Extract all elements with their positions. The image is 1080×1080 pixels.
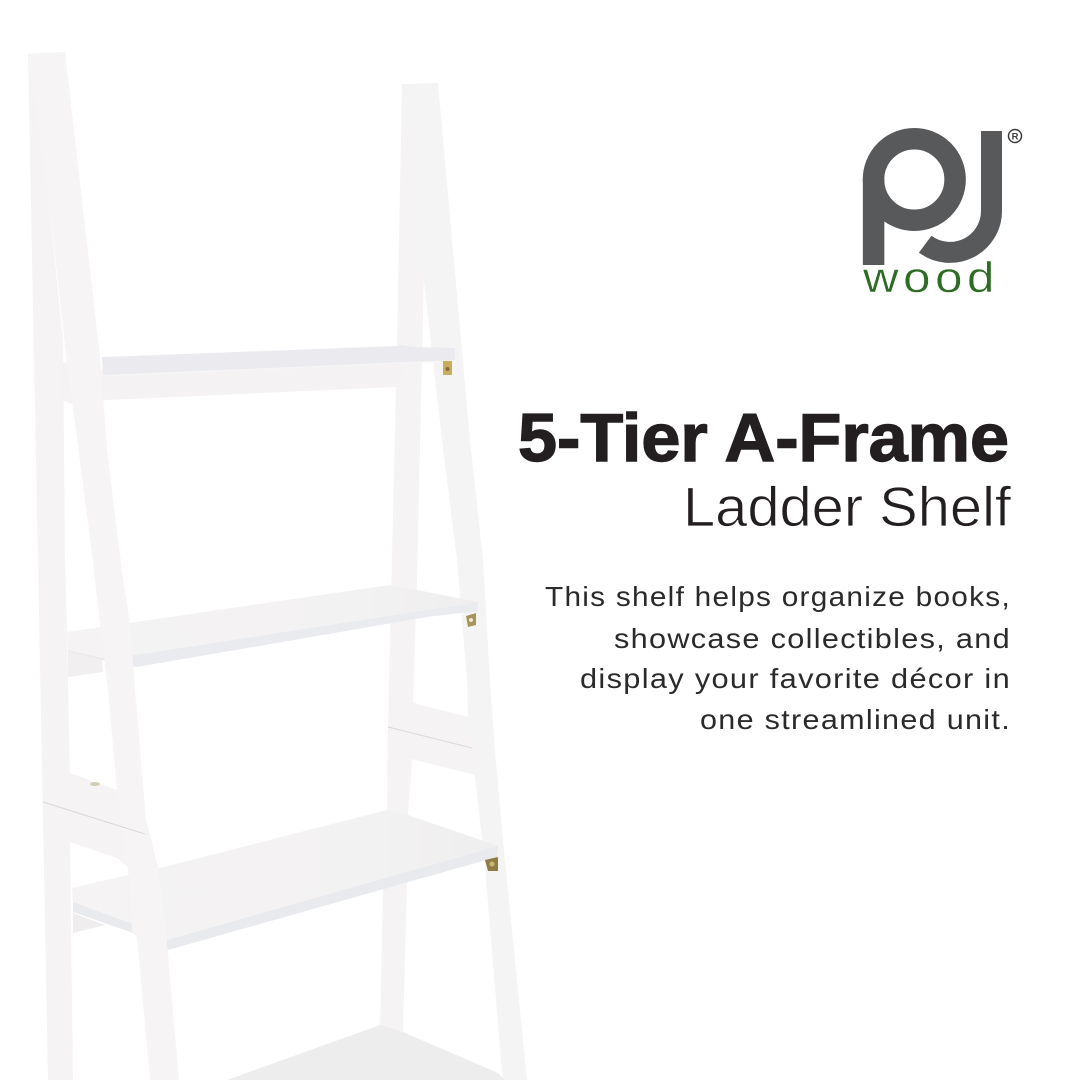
logo: PJ wood (862, 130, 1022, 302)
left front leg (28, 52, 179, 1080)
shelf 1 (102, 345, 455, 377)
shelf 4 (227, 1025, 505, 1080)
description text block: showcase collectibles, and (614, 623, 1011, 654)
product image: white ladder shelf (28, 52, 527, 1080)
brass bracket 3 (485, 857, 498, 871)
left back leg (28, 54, 73, 1080)
heading line 1: 5-Tier A-Frame (518, 400, 1009, 476)
registered mark: R (1012, 132, 1019, 142)
registered mark (1008, 130, 1022, 142)
description text block (545, 581, 1011, 735)
logo letter p (874, 139, 955, 265)
left stub rail under third shelf (73, 913, 105, 933)
shelf 2 (67, 585, 478, 667)
shelf 3 (72, 810, 498, 950)
left frame crossbar (43, 773, 158, 867)
screw (90, 782, 100, 786)
description text block: display your favorite décor in (580, 663, 1011, 694)
brass bracket 2 (466, 613, 476, 627)
left stub rail under second shelf (68, 652, 103, 677)
frame joint seams (43, 727, 472, 834)
logo word wood: wood (862, 254, 999, 302)
top rail beneath first shelf (62, 358, 407, 404)
heading line 2: Ladder Shelf (683, 475, 1011, 538)
description text block: one streamlined unit. (700, 704, 1011, 735)
brass bracket 1 (443, 361, 452, 375)
logo letter j (925, 131, 992, 252)
right frame crossbar (388, 698, 498, 785)
right front leg (402, 83, 527, 1080)
right back leg (378, 84, 424, 1080)
title (518, 400, 1011, 538)
description text block: This shelf helps organize books, (545, 581, 1011, 612)
